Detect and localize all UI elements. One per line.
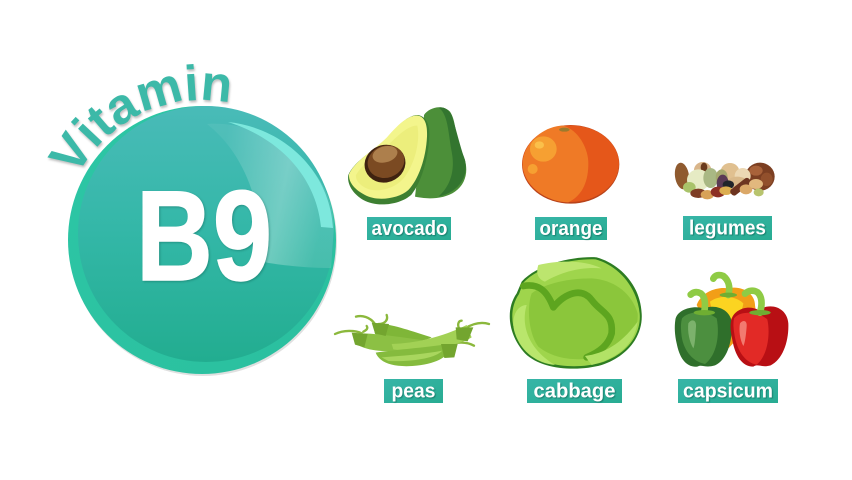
icon: pea pods <box>335 315 489 366</box>
food: peas <box>335 315 489 403</box>
label: orange: orange <box>540 218 602 240</box>
yellow pepper <box>697 275 757 348</box>
red pepper <box>731 291 788 367</box>
label: capsicum: capsicum <box>683 380 773 402</box>
food: orange <box>522 125 619 240</box>
curved title: Vitamin: Vitamin <box>48 64 232 168</box>
icon: cabbage <box>510 257 642 369</box>
food: capsicum <box>675 275 788 403</box>
label: cabbage: cabbage <box>534 380 616 402</box>
icon: mixed legumes and nuts <box>673 162 775 199</box>
food: legumes <box>673 162 775 240</box>
label: avocado: avocado <box>372 218 448 240</box>
heading: B9: B9 <box>136 165 272 308</box>
glossy teal disc <box>68 106 337 376</box>
vitamin badge <box>48 64 337 376</box>
label: peas: peas <box>392 380 436 402</box>
food: cabbage <box>510 257 642 403</box>
icon: capsicums <box>675 275 788 367</box>
food: avocado <box>348 107 466 240</box>
green pepper <box>675 292 732 367</box>
icon: avocado <box>348 107 466 204</box>
icon: orange <box>522 125 619 204</box>
label: legumes: legumes <box>689 218 766 240</box>
